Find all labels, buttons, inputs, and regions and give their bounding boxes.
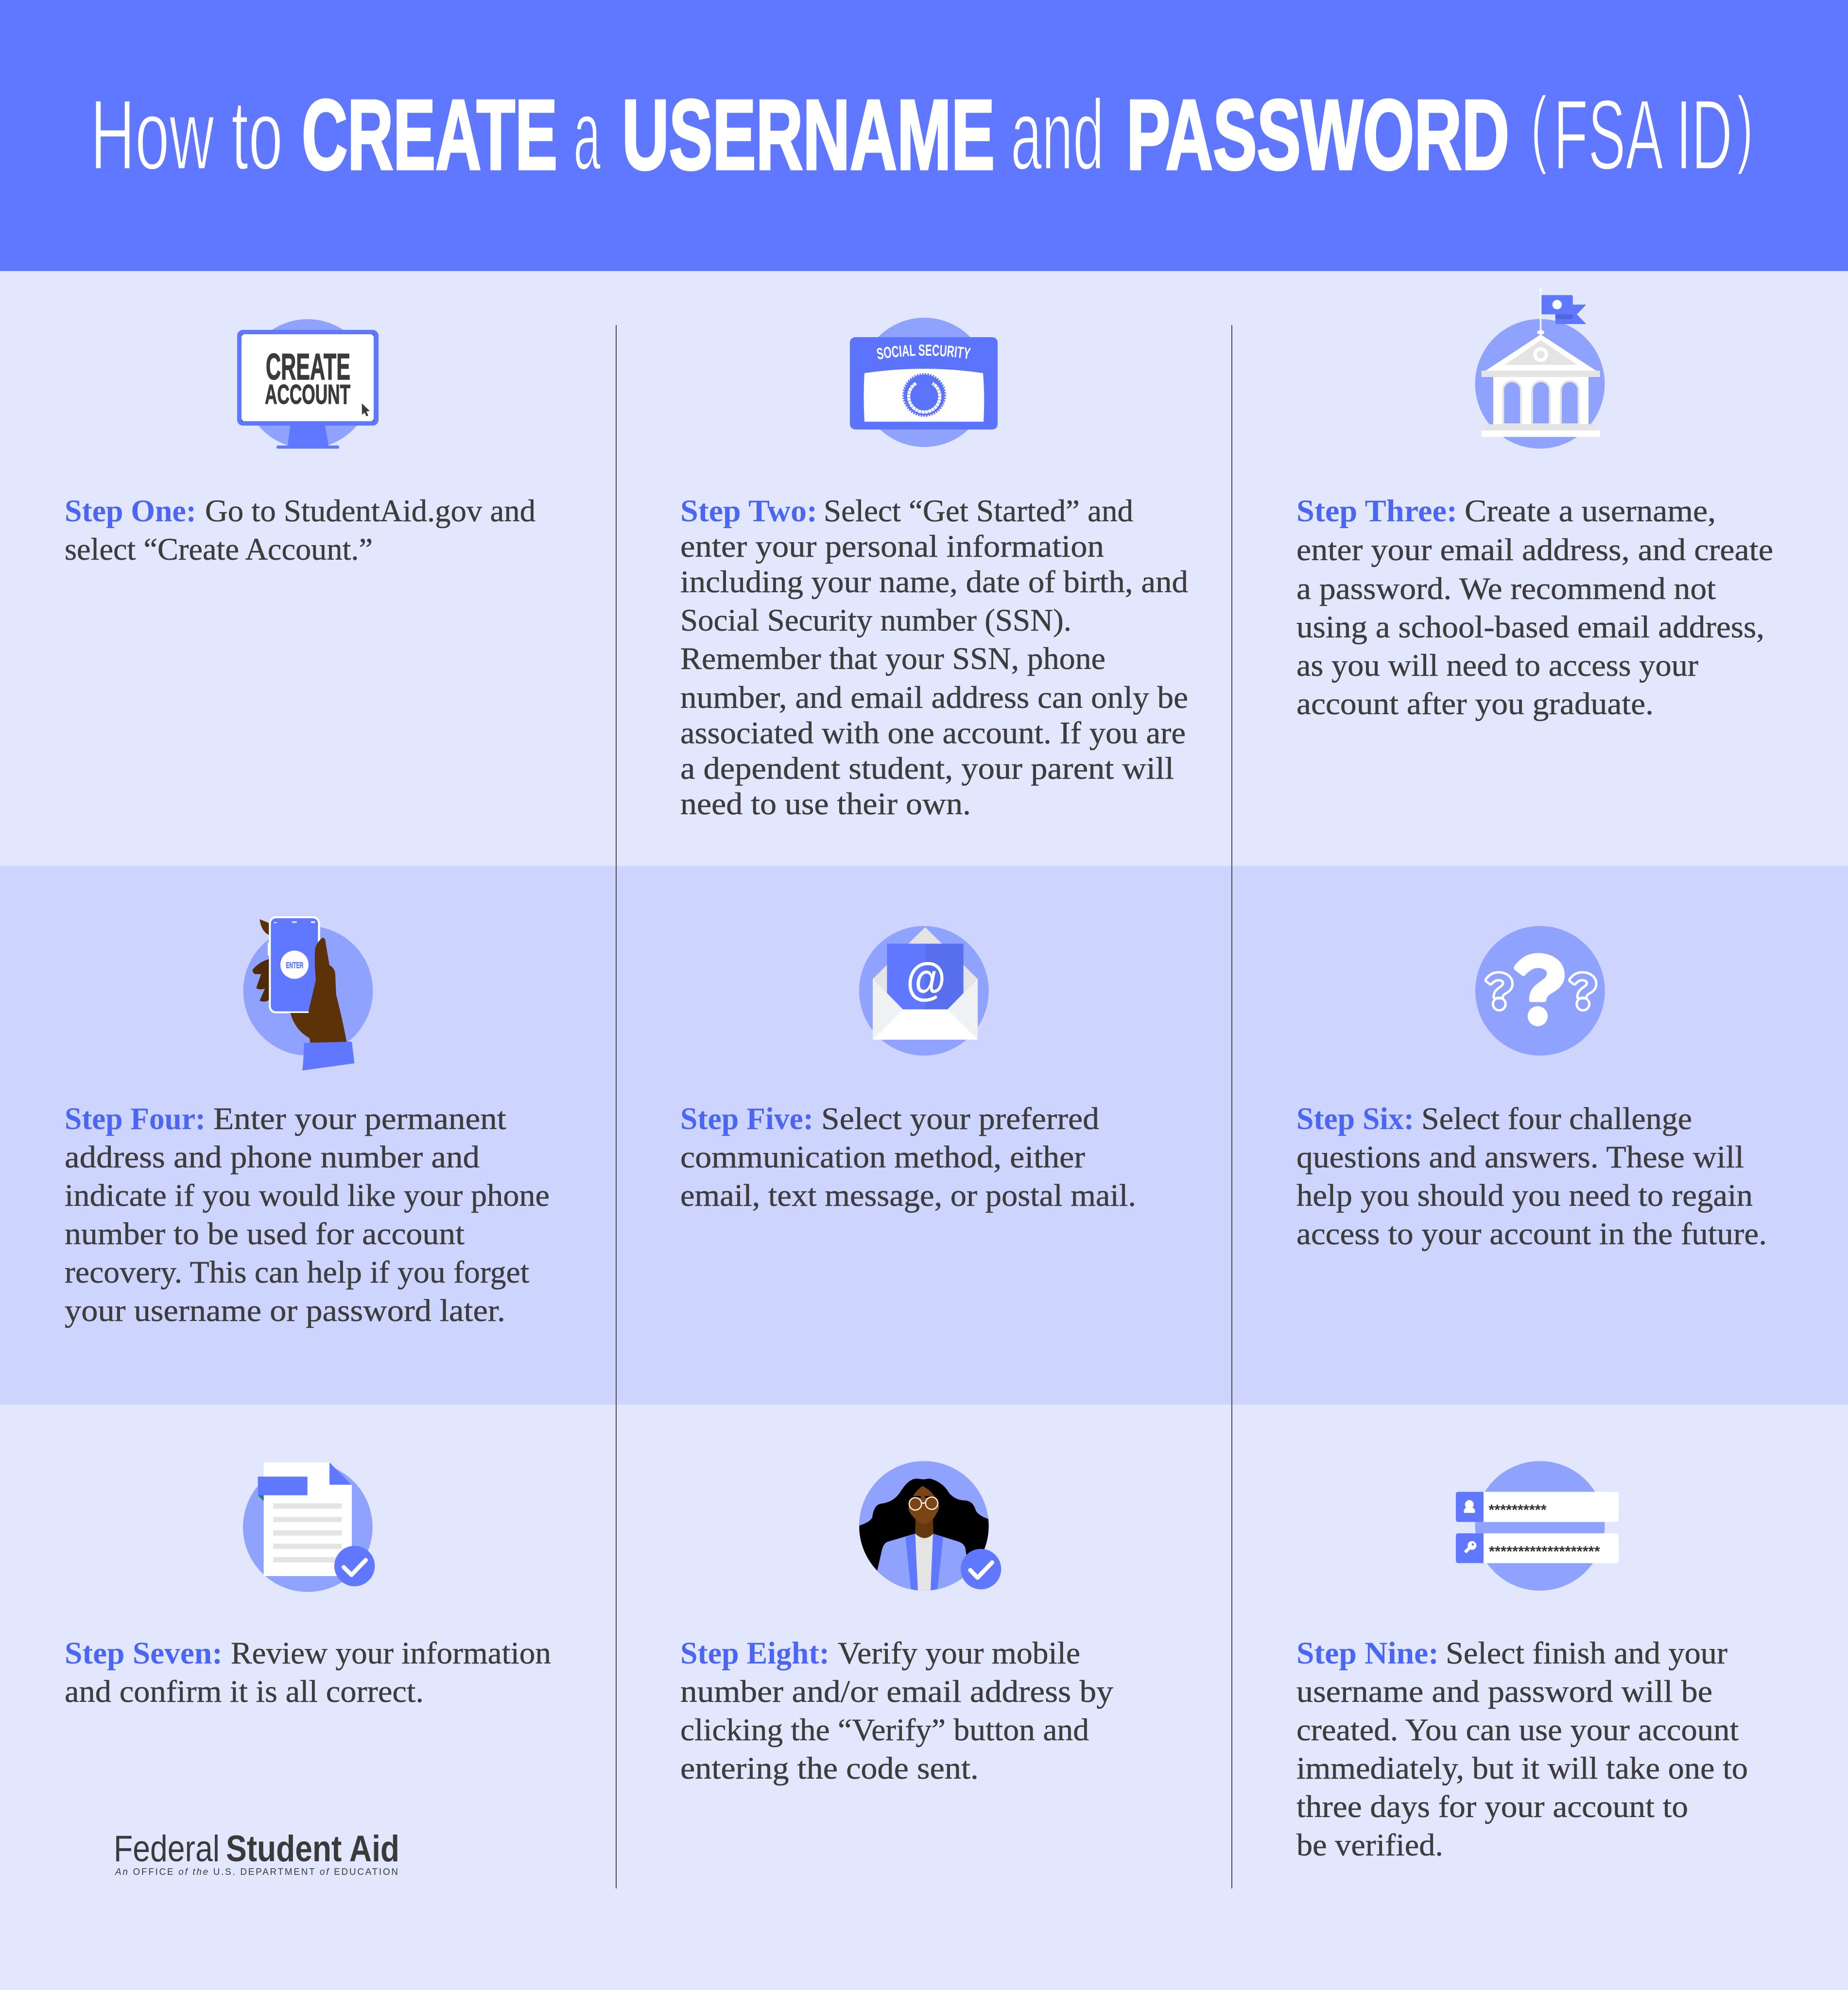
step six text (1296, 1101, 1767, 1252)
icon: hand holding phone (243, 916, 373, 1070)
logo: Federal Student Aid: Student Aid (226, 1828, 399, 1870)
title (90, 79, 1753, 190)
step six text: Select four challenge (1421, 1101, 1692, 1136)
step four text: your username or password later. (65, 1293, 505, 1328)
panel: step eight (680, 1461, 1114, 1786)
step two text: need to use their own. (680, 787, 971, 822)
step six text: Step Six: (1296, 1101, 1414, 1136)
icon: computer monitor with create account: CREATE (266, 346, 350, 388)
step one text: Step One: (65, 494, 196, 529)
step three text: Create a username, (1465, 494, 1716, 529)
step nine text: immediately, but it will take one to (1296, 1751, 1748, 1786)
step eight text (680, 1636, 1114, 1786)
step one text: select “Create Account.” (65, 532, 373, 567)
header band (0, 0, 1848, 271)
step eight text: clicking the “Verify” button and (680, 1713, 1089, 1748)
step six text: questions and answers. These will (1296, 1140, 1744, 1175)
title: How to (90, 79, 283, 190)
step eight text: number and/or email address by (680, 1674, 1114, 1709)
step two text: Select “Get Started” and (824, 494, 1133, 529)
title: CREATE (302, 79, 557, 190)
icon: computer monitor with create account: ACCOUNT (265, 379, 350, 410)
step two text: number, and email address can only be (680, 680, 1188, 715)
middle row band (0, 866, 1848, 1405)
icon: username and password fields: ********** (1488, 1502, 1547, 1518)
step three text: enter your email address, and create (1296, 532, 1773, 567)
step eight text: Verify your mobile (838, 1636, 1080, 1671)
step nine text: three days for your account to (1296, 1789, 1688, 1824)
title: ( (1531, 79, 1547, 175)
step seven text: and confirm it is all correct. (65, 1674, 424, 1709)
step three text: using a school-based email address, (1296, 610, 1764, 645)
step five text (680, 1101, 1136, 1213)
icon: document with check (243, 1462, 375, 1592)
step five text: Select your preferred (821, 1101, 1099, 1136)
icon: woman with glasses and check (859, 1461, 1001, 1594)
step eight text: entering the code sent. (680, 1751, 979, 1786)
panel: step seven (65, 1462, 551, 1709)
step three text: as you will need to access your (1296, 648, 1698, 683)
icon: open envelope with at sign (859, 926, 989, 1056)
panel: step five (680, 926, 1136, 1213)
step three text: Step Three: (1296, 494, 1457, 529)
icon: school building with flag (1475, 288, 1605, 448)
panel: step six (1296, 926, 1767, 1252)
icon: social security card: SOCIAL SECURITY (877, 344, 971, 360)
panel: step two (680, 318, 1188, 822)
step eight text: Step Eight: (680, 1636, 829, 1671)
step five text: communication method, either (680, 1140, 1085, 1175)
panel: step nine (1296, 1461, 1748, 1863)
title: and (1011, 79, 1104, 190)
step three text: a password. We recommend not (1296, 571, 1716, 606)
step two text: Step Two: (680, 494, 817, 529)
step seven text: Review your information (231, 1636, 551, 1671)
icon: question marks (1475, 926, 1605, 1056)
step three text: account after you graduate. (1296, 686, 1654, 721)
step four text: number to be used for account (65, 1217, 465, 1252)
step seven text: Step Seven: (65, 1636, 223, 1671)
title: a (573, 79, 601, 190)
step nine text: be verified. (1296, 1828, 1443, 1863)
step nine text: Step Nine: (1296, 1636, 1439, 1671)
logo: Federal Student Aid (114, 1828, 399, 1877)
panel: step one (65, 319, 535, 567)
panel: step four (65, 916, 550, 1328)
panel: step three (1296, 288, 1773, 721)
step two text: including your name, date of birth, and (680, 565, 1188, 600)
icon: username and password fields (1456, 1461, 1619, 1591)
icon: social security card (850, 318, 998, 447)
step six text: help you should you need to regain (1296, 1178, 1753, 1213)
step one text (65, 494, 535, 567)
step nine text: username and password will be (1296, 1674, 1712, 1709)
step two text: Remember that your SSN, phone (680, 641, 1105, 676)
title: PASSWORD (1126, 79, 1509, 190)
step four text: Step Four: (65, 1101, 206, 1136)
logo: Federal Student Aid: Federal (114, 1828, 220, 1870)
step nine text (1296, 1636, 1748, 1863)
icon: hand holding phone: ENTER (286, 960, 303, 970)
step three text (1296, 494, 1773, 721)
step nine text: Select finish and your (1446, 1636, 1727, 1671)
step two text (680, 494, 1188, 822)
step four text: Enter your permanent (213, 1101, 506, 1136)
step four text (65, 1101, 550, 1328)
logo: Federal Student Aid: An OFFICE of the U.S. DEPARTMENT of EDUCATION (115, 1867, 398, 1877)
step two text: a dependent student, your parent will (680, 751, 1174, 786)
step four text: address and phone number and (65, 1140, 480, 1175)
icon: open envelope with at sign: @ (905, 954, 945, 1005)
step two text: associated with one account. If you are (680, 716, 1186, 751)
step one text: Go to StudentAid.gov and (205, 494, 535, 529)
step five text: email, text message, or postal mail. (680, 1178, 1136, 1213)
step six text: access to your account in the future. (1296, 1217, 1767, 1252)
step four text: indicate if you would like your phone (65, 1178, 550, 1213)
icon: username and password fields: ******************* (1489, 1544, 1600, 1560)
title: ) (1737, 79, 1753, 175)
step two text: Social Security number (SSN). (680, 603, 1071, 638)
icon: computer monitor with create account (237, 319, 379, 449)
step nine text: created. You can use your account (1296, 1713, 1739, 1748)
step four text: recovery. This can help if you forget (65, 1255, 529, 1290)
title: USERNAME (622, 79, 995, 190)
step seven text (65, 1636, 551, 1709)
step five text: Step Five: (680, 1101, 813, 1136)
step two text: enter your personal information (680, 529, 1104, 564)
